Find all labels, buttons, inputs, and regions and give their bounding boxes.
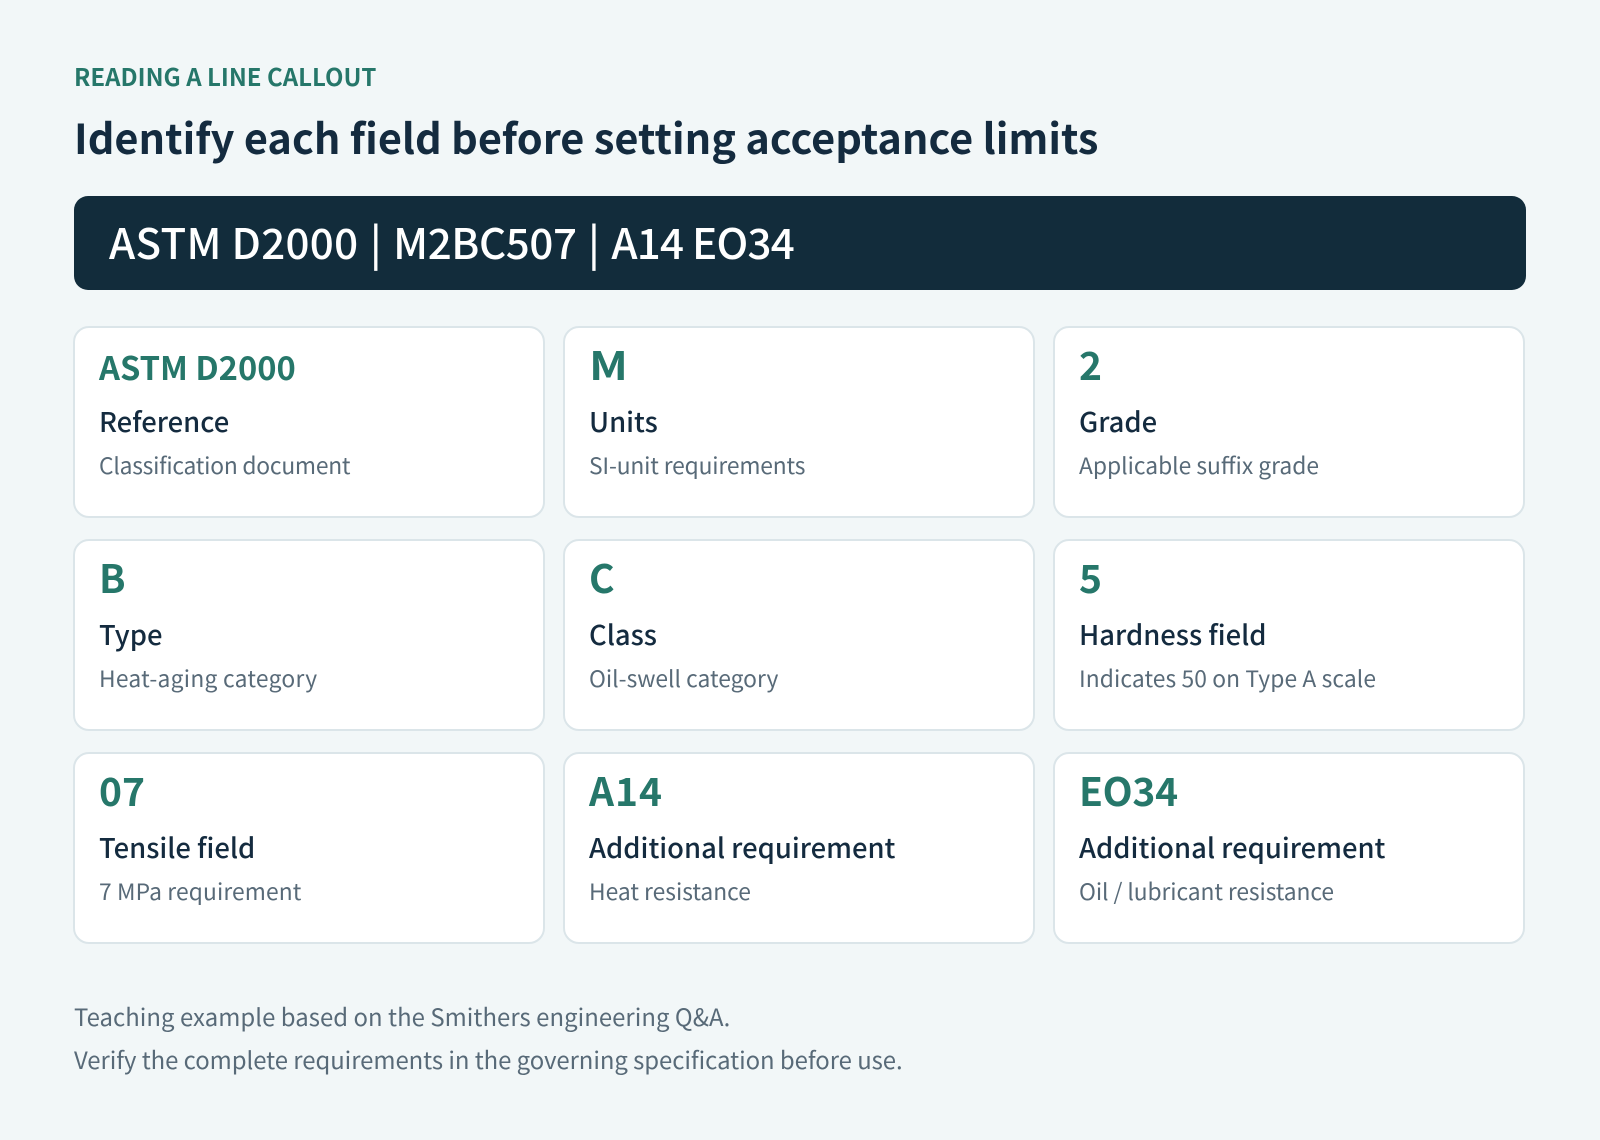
panel: B: Type <box>99 613 162 653</box>
panel: 07: 07 <box>99 762 145 818</box>
panel: M: Units <box>589 400 658 440</box>
panel: EO34 <box>1053 752 1525 944</box>
panel: C: Class <box>589 613 657 653</box>
panel: ASTM D2000 <box>73 326 545 518</box>
footnote <box>74 998 903 1076</box>
panel: 2: 2 <box>1079 336 1102 392</box>
footnote: Verify the complete requirements in the governing specification before use. <box>74 1041 903 1076</box>
panel: 07 <box>73 752 545 944</box>
panel: A14: Heat resistance <box>589 874 751 907</box>
panel: C: C <box>589 549 615 605</box>
panel: EO34: Oil / lubricant resistance <box>1079 874 1334 907</box>
callout bar <box>74 196 1526 290</box>
panel: A14: Additional requirement <box>589 826 895 866</box>
panel: 07: 7 MPa requirement <box>99 874 302 907</box>
panel: 5: Indicates 50 on Type A scale <box>1079 661 1376 694</box>
panel: ASTM D2000: Classification document <box>99 448 350 481</box>
title: Identify each field before setting acceptance limits <box>74 106 1098 166</box>
callout text: ASTM D2000 | M2BC507 | A14 EO34 <box>109 211 794 272</box>
panel: B: B <box>99 549 126 605</box>
panel: C <box>563 539 1035 731</box>
panel: M <box>563 326 1035 518</box>
panel: 2: Grade <box>1079 400 1157 440</box>
panel: 5: 5 <box>1079 549 1102 605</box>
panel: B <box>73 539 545 731</box>
panel: M: SI-unit requirements <box>589 448 805 481</box>
panel: A14: A14 <box>589 762 663 818</box>
panel: EO34: EO34 <box>1079 762 1178 818</box>
panel: 07: Tensile field <box>99 826 255 866</box>
panel: ASTM D2000: Reference <box>99 400 229 440</box>
panel: C: Oil-swell category <box>589 661 778 694</box>
eyebrow: READING A LINE CALLOUT <box>74 58 376 93</box>
panel: ASTM D2000: ASTM D2000 <box>99 343 296 390</box>
panel: A14 <box>563 752 1035 944</box>
panel: EO34: Additional requirement <box>1079 826 1385 866</box>
footnote: Teaching example based on the Smithers engineering Q&A. <box>74 998 730 1033</box>
panel: M: M <box>589 336 628 392</box>
panel: 5: Hardness field <box>1079 613 1267 653</box>
panel: 2: Applicable suffix grade <box>1079 448 1319 481</box>
panel: 5 <box>1053 539 1525 731</box>
panel: 2 <box>1053 326 1525 518</box>
panel: B: Heat-aging category <box>99 661 317 694</box>
